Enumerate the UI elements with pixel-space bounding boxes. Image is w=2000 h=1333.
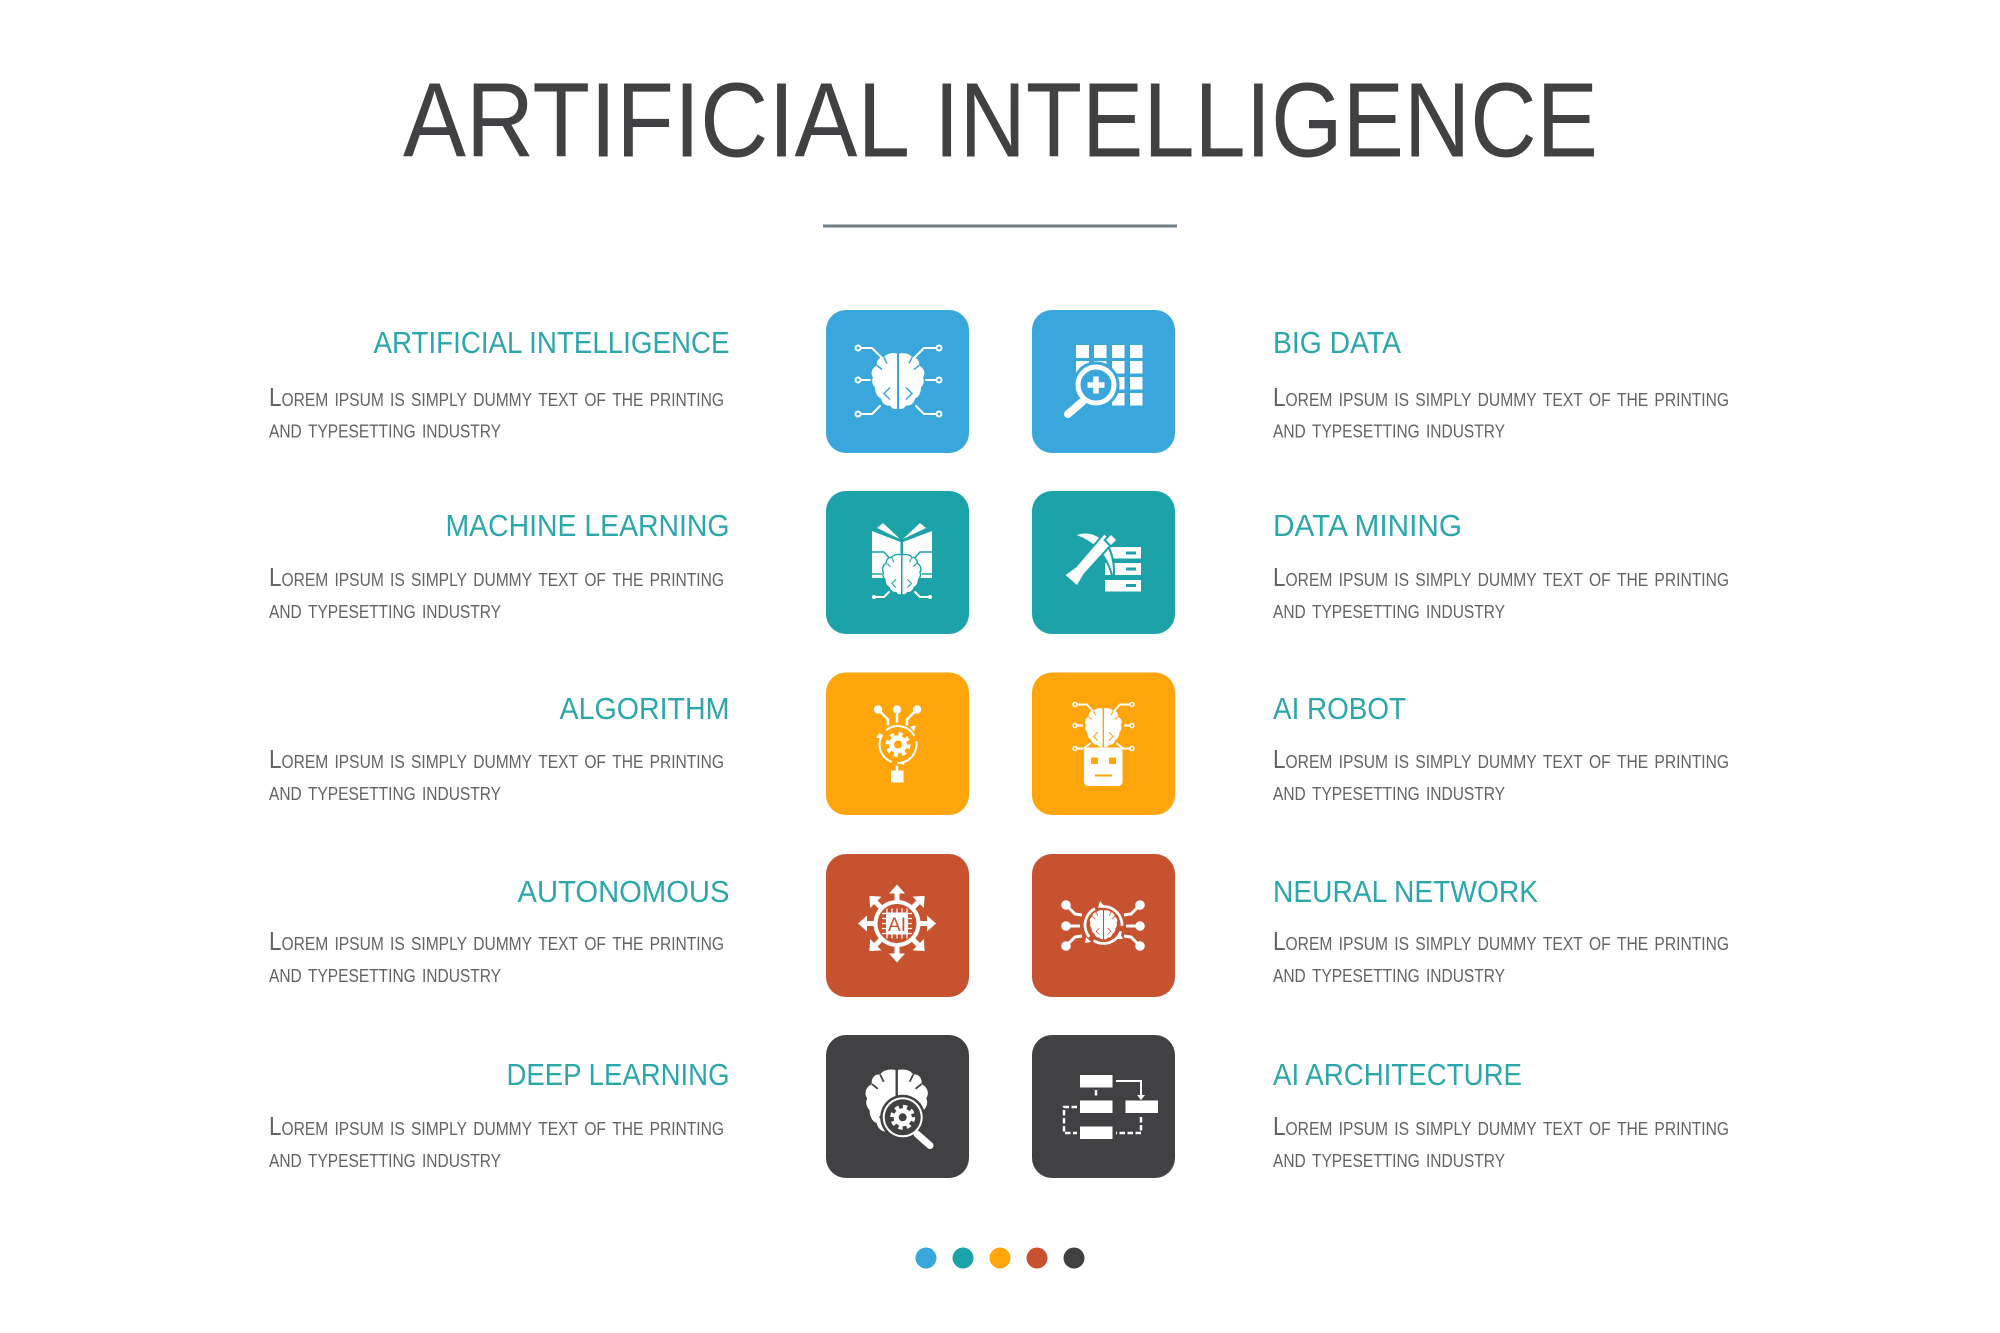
panel: neural network text: and typesetting industry [1273,958,1505,988]
panel: neural network text: NEURAL NETWORK [1273,874,1538,909]
icon: algorithm gear with nodes [826,672,969,815]
panel: ai robot text: and typesetting industry [1273,776,1505,806]
panel: ai architecture text: AI ARCHITECTURE [1273,1057,1522,1092]
panel: ai robot text [1273,691,1729,806]
panel: neural network text: Lorem ipsum is simply dummy text of the printing [1273,926,1729,956]
icon: autonomous ai chip with arrows [826,854,969,997]
panel: big data text: Lorem ipsum is simply dummy text of the printing [1273,382,1729,412]
panel: data mining text: and typesetting industry [1273,594,1505,624]
panel: data mining text: DATA MINING [1273,508,1462,543]
panel: algorithm text: Lorem ipsum is simply dummy text of the printing [269,744,724,774]
panel: autonomous text: AUTONOMOUS [518,874,730,909]
panel: big data text [1273,325,1729,444]
panel: autonomous text: and typesetting industry [269,958,501,988]
icon: autonomous ai chip with arrows: AI [888,915,906,936]
panel: machine learning text: MACHINE LEARNING [446,508,730,543]
panel: artificial intelligence text: ARTIFICIAL INTELLIGENCE [374,325,730,360]
panel: algorithm text [269,691,730,806]
icon: deep learning brain with magnifier [826,1035,969,1178]
panel: ai robot text: AI ROBOT [1273,691,1406,726]
panel: data mining text [1273,508,1729,624]
title: ARTIFICIAL [403,62,910,180]
panel: data mining text: Lorem ipsum is simply dummy text of the printing [1273,562,1729,592]
icon: neural network brain with nodes [1032,854,1175,997]
icon: artificial intelligence brain with circuits [826,310,969,453]
title [403,62,1598,180]
panel: neural network text [1273,874,1729,988]
panel: deep learning text: DEEP LEARNING [506,1057,730,1092]
panel: ai architecture text [1273,1057,1729,1173]
icon: machine learning book with brain [826,491,969,634]
panel: ai architecture text: and typesetting industry [1273,1143,1505,1173]
panel: big data text: BIG DATA [1273,325,1401,360]
panel: artificial intelligence text: and typesetting industry [269,414,501,444]
title: INTELLIGENCE [934,62,1598,180]
panel: machine learning text: Lorem ipsum is simply dummy text of the printing [269,562,724,592]
panel: deep learning text [269,1057,730,1173]
panel: machine learning text [269,508,730,624]
panel: ai architecture text: Lorem ipsum is simply dummy text of the printing [1273,1111,1729,1141]
panel: autonomous text [269,874,730,988]
panel: algorithm text: ALGORITHM [560,691,730,726]
panel: big data text: and typesetting industry [1273,414,1505,444]
panel: ai robot text: Lorem ipsum is simply dummy text of the printing [1273,744,1729,774]
legend: colour dots [916,1248,1084,1268]
panel: artificial intelligence text [269,325,730,444]
panel: autonomous text: Lorem ipsum is simply dummy text of the printing [269,926,724,956]
panel: algorithm text: and typesetting industry [269,776,501,806]
panel: artificial intelligence text: Lorem ipsum is simply dummy text of the printing [269,382,724,412]
panel: machine learning text: and typesetting industry [269,594,501,624]
icon: big data grid with magnifier [1032,310,1175,453]
icon: ai architecture flowchart [1032,1035,1175,1178]
panel: deep learning text: and typesetting industry [269,1143,501,1173]
icon: ai robot with brain [1032,672,1175,815]
icon: data mining pickaxe with server [1032,491,1175,634]
panel: deep learning text: Lorem ipsum is simply dummy text of the printing [269,1111,724,1141]
